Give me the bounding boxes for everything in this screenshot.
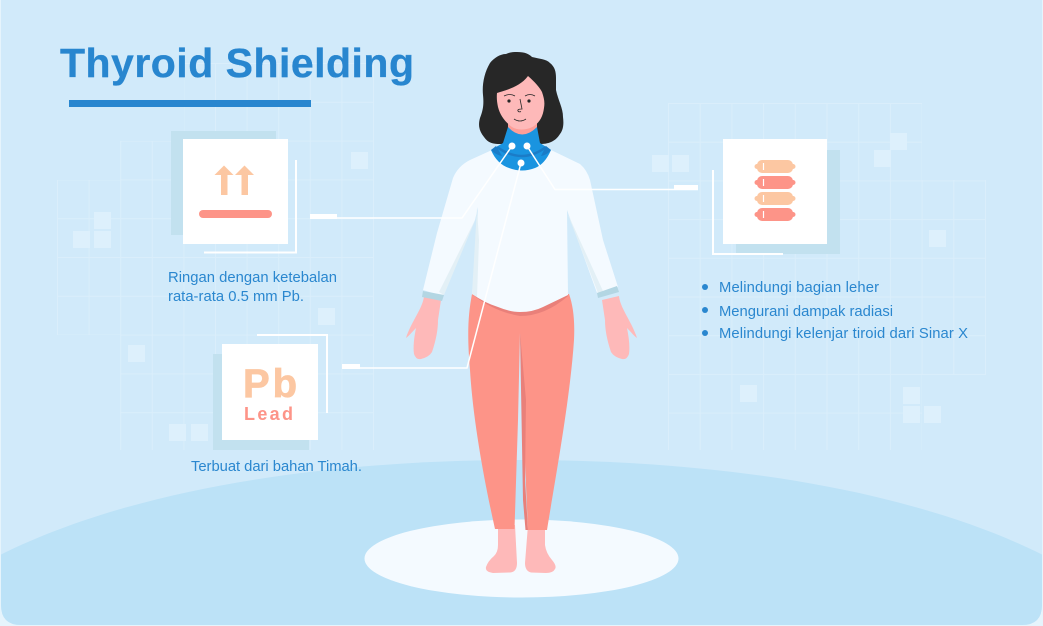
panel: benefits card [713,139,840,254]
hair [479,52,563,144]
floor spot [364,520,678,598]
trousers [468,292,574,530]
feet [486,525,556,573]
text: benefits list: Melindungi bagian leher [719,280,879,296]
text: lightweight description [168,270,337,305]
text: lightweight description: rata-rata 0.5 mm Pb. [168,289,304,305]
facial features [504,94,535,121]
thyroid collar [491,127,551,170]
text: lightweight description: Ringan dengan ketebalan [168,270,337,286]
title underline [69,100,311,107]
shirt [422,150,619,312]
icon: stacked collar segments [754,160,796,221]
hands [406,296,637,359]
panel: lightweight card [171,131,296,252]
text: benefits list [702,280,968,342]
connector: benefits to collar [524,142,698,190]
title: Thyroid Shielding [60,40,414,86]
figure: woman wearing thyroid shield [406,52,637,573]
panel: lead card [213,335,327,450]
icon: Pb Lead symbol: Pb [243,362,297,406]
connector: lightweight to collar [310,142,516,219]
icon: up arrows above bar [199,166,272,218]
text: material description: Terbuat dari bahan Timah. [191,459,362,475]
text: benefits list: Melindungi kelenjar tiroid dari Sinar X [719,326,968,342]
text: benefits list: Mengurani dampak radiasi [719,304,893,320]
neck and face [497,76,544,138]
icon: Pb Lead symbol: Lead [244,404,293,424]
connector: lead to collar [342,160,524,369]
